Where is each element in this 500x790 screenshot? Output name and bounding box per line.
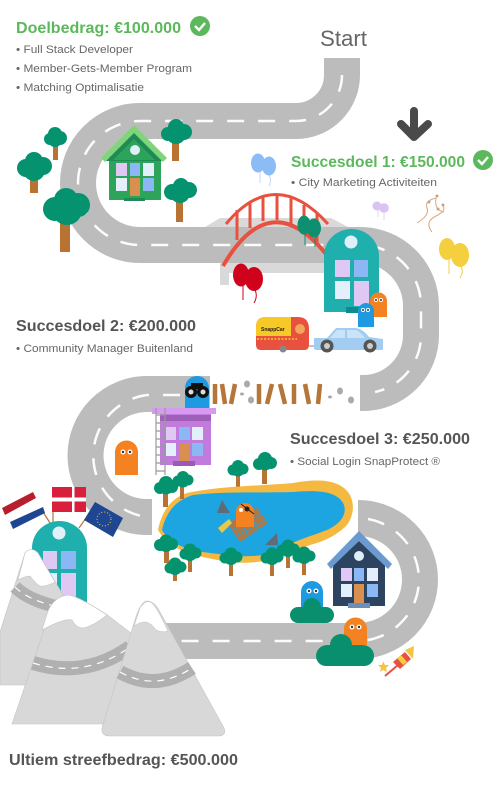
text: Succesdoel 2 item: • Community Manager Buitenland	[16, 343, 193, 355]
list: Doelbedrag items: • Member-Gets-Member Program	[16, 63, 192, 75]
road: middle curve	[85, 394, 210, 517]
list: Doelbedrag items: • Matching Optimalisatie	[16, 82, 144, 94]
character: blue ghost behind bush	[290, 581, 334, 623]
text: Succesdoel 3 item: • Social Login SnapProtect ®	[290, 456, 440, 468]
house: dark blue	[327, 531, 392, 608]
character: blue ghost at teal house	[358, 303, 374, 327]
vehicle: blue car	[314, 328, 383, 352]
balloons: red	[233, 264, 263, 303]
mountain: left	[0, 550, 90, 685]
character: blue ghost with binoculars	[185, 376, 209, 408]
icon: down arrow	[401, 111, 428, 137]
raft with orange ghost	[218, 503, 268, 542]
heading: Succesdoel 1: Succesdoel 1: €150.000	[291, 154, 465, 171]
balloons: lilac	[372, 202, 389, 220]
mountain: right	[102, 601, 225, 736]
character: orange ghost at teal house	[370, 292, 387, 317]
list: Doelbedrag items	[16, 44, 192, 94]
heading: Succesdoel 3: Succesdoel 3: €250.000	[290, 431, 470, 448]
bridge arches	[223, 194, 328, 266]
fence stakes and stones	[215, 380, 354, 404]
character: orange ghost	[115, 440, 138, 475]
heading: Ultiem streefbedrag: Ultiem streefbedrag: €500.000	[9, 752, 238, 769]
trees: top left	[17, 119, 197, 252]
icon: check Succesdoel 1	[473, 150, 493, 170]
icon: check Doelbedrag	[190, 16, 210, 36]
house: green	[101, 125, 167, 201]
icon: firework rocket	[378, 646, 414, 676]
shark fins	[217, 500, 278, 545]
flags	[2, 487, 123, 537]
ladder	[156, 408, 165, 475]
lake with sandy shore	[158, 481, 353, 563]
trees: above lake	[228, 452, 277, 488]
road: lower curve	[165, 518, 420, 641]
house: purple	[152, 408, 216, 466]
balloons: green	[298, 216, 321, 247]
balloons: blue	[251, 154, 276, 186]
character: orange ghost behind bush	[316, 618, 374, 666]
list: Doelbedrag items: • Full Stack Developer	[16, 44, 133, 56]
balloons: yellow	[439, 238, 469, 278]
bridge deck	[205, 218, 348, 285]
road: upper winding section	[78, 58, 421, 393]
trees: below lake	[154, 534, 316, 581]
house: teal with flags	[32, 521, 87, 620]
vehicle: SnappCar caravan	[256, 317, 314, 352]
house: teal	[324, 229, 379, 313]
heading: Doelbedrag: Doelbedrag: €100.000	[16, 20, 181, 37]
mountain: centre	[12, 595, 140, 724]
heading: Succesdoel 2: Succesdoel 2: €200.000	[16, 318, 196, 335]
text: Succesdoel 1 item: • City Marketing Activiteiten	[291, 177, 437, 189]
vehicle: SnappCar caravan: SnappCar	[261, 327, 285, 333]
label: Start: Start	[320, 26, 367, 51]
trees: lake left	[154, 471, 194, 507]
confetti	[417, 195, 444, 232]
